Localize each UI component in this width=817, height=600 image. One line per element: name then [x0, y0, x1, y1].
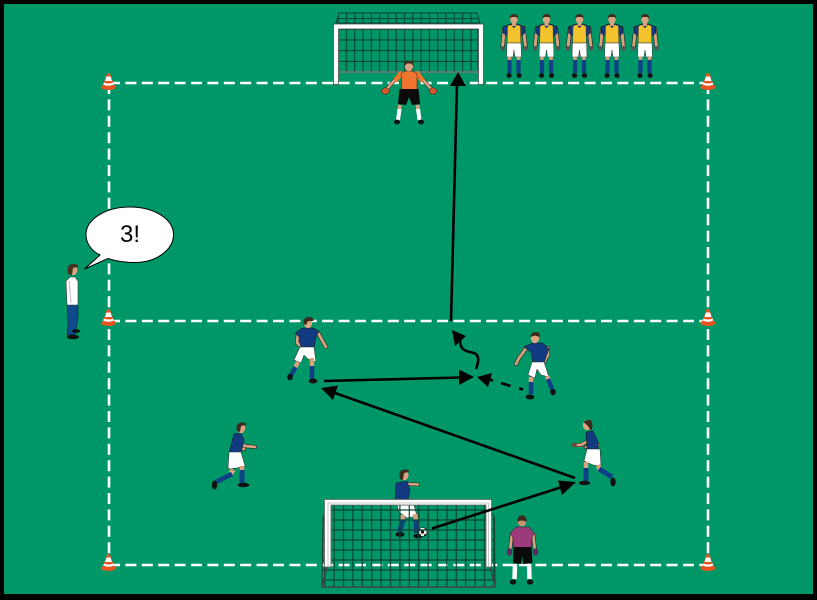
player: upper left — [287, 317, 326, 384]
arrow: pass from right player to upper left player — [321, 386, 575, 478]
top goal — [334, 13, 484, 84]
goalkeeper — [382, 60, 437, 124]
referee — [507, 516, 538, 585]
field dashed lines — [109, 83, 708, 565]
ball — [418, 528, 427, 536]
bottom goal — [322, 500, 495, 587]
player: left running — [212, 422, 255, 490]
arrow: pass from ball to right player — [432, 480, 576, 528]
arrow: shot on goal — [450, 72, 466, 321]
cones — [101, 73, 716, 571]
arrow: dashed run to centre — [477, 373, 523, 390]
speech bubble — [84, 207, 174, 269]
speech bubble: 3! — [120, 221, 140, 248]
arrow: dribble wavy — [452, 330, 478, 369]
arrow: pass to centre — [324, 370, 474, 385]
coach — [66, 264, 80, 339]
player: right of centre — [516, 332, 556, 400]
waiting players in yellow bibs — [500, 14, 658, 78]
player: kicker with ball — [395, 470, 422, 538]
player: right running — [571, 420, 616, 486]
